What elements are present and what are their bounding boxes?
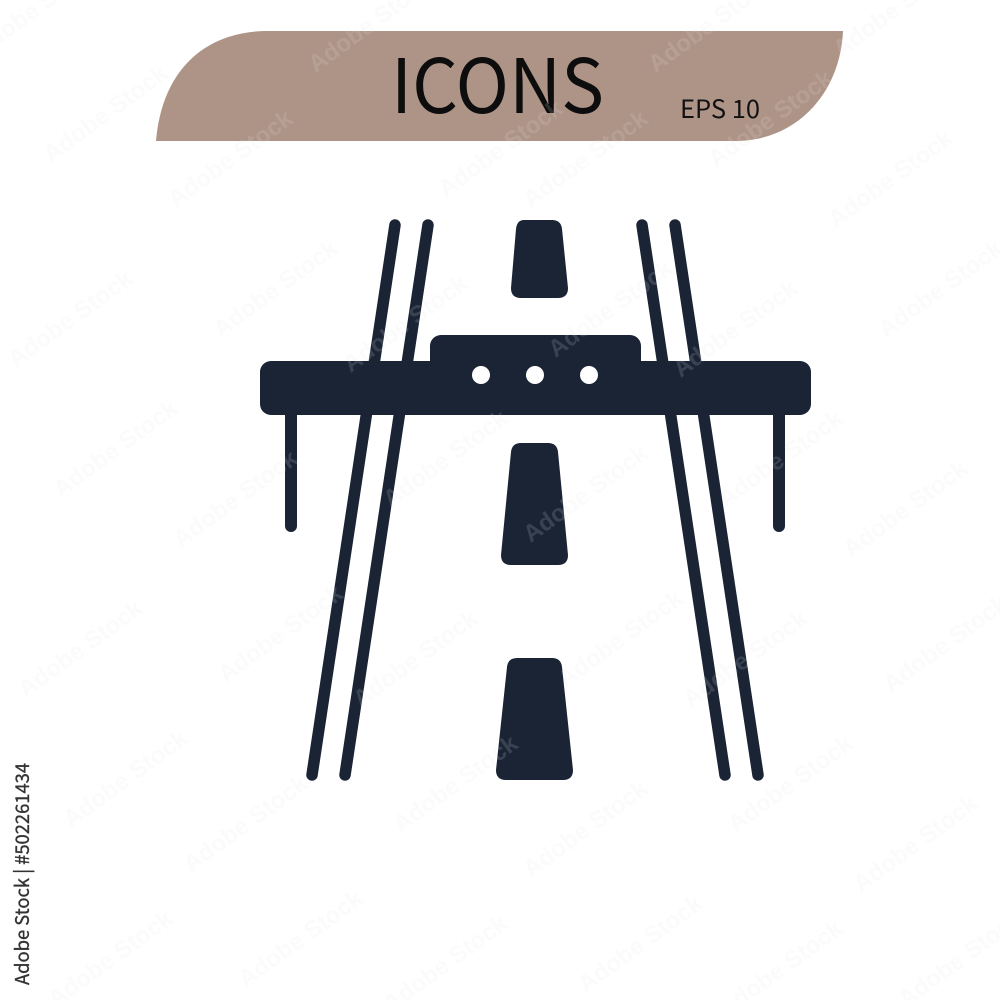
watermark pattern: Adobe Stock — [208, 235, 343, 343]
watermark pattern: Adobe Stock — [348, 605, 483, 713]
watermark pattern: Adobe Stock — [178, 770, 313, 878]
icon: highway with overpass — [260, 220, 811, 780]
watermark pattern: Adobe Stock — [13, 595, 148, 703]
watermark pattern: Adobe Stock — [848, 790, 983, 898]
watermark pattern: Adobe Stock — [703, 65, 838, 173]
watermark pattern: Adobe Stock — [543, 255, 678, 363]
lane marking bottom — [496, 658, 573, 780]
watermark pattern: Adobe Stock — [518, 105, 653, 213]
support posts — [291, 405, 779, 526]
watermark pattern: Adobe Stock — [838, 455, 973, 563]
watermark pattern: Adobe Stock — [713, 405, 848, 513]
watermark pattern: Adobe Stock — [378, 405, 513, 513]
watermark pattern: Adobe Stock — [723, 730, 858, 838]
watermark pattern: Adobe Stock — [3, 265, 138, 373]
watermark pattern: Adobe Stock — [823, 125, 958, 233]
version label: EPS 10 — [680, 90, 760, 126]
watermark pattern: Adobe Stock — [48, 395, 183, 503]
lane marking top — [511, 220, 568, 298]
watermark pattern: Adobe Stock — [58, 725, 193, 833]
lane marking middle — [501, 443, 568, 565]
watermark pattern: Adobe Stock — [388, 730, 523, 838]
watermark pattern: Adobe Stock — [38, 60, 173, 168]
watermark pattern: Adobe Stock — [163, 105, 298, 213]
title: ICONS — [391, 26, 604, 135]
watermark pattern: Adobe Stock — [213, 580, 348, 688]
watermark pattern: Adobe Stock — [573, 890, 708, 998]
watermark pattern: Adobe Stock — [518, 775, 653, 883]
overpass deck — [260, 335, 811, 415]
watermark pattern: Adobe Stock — [433, 95, 568, 203]
watermark pattern: Adobe Stock — [518, 440, 653, 548]
watermark pattern: Adobe Stock — [168, 445, 303, 553]
road edge lines — [312, 225, 758, 775]
watermark pattern: Adobe Stock — [668, 275, 803, 383]
watermark pattern: Adobe Stock — [338, 270, 473, 378]
banner — [156, 26, 843, 141]
watermark pattern: Adobe Stock — [553, 585, 688, 693]
stock id: Adobe Stock | #502261434 — [8, 763, 35, 985]
watermark pattern: Adobe Stock — [233, 885, 368, 993]
watermark pattern: Adobe Stock — [678, 605, 813, 713]
